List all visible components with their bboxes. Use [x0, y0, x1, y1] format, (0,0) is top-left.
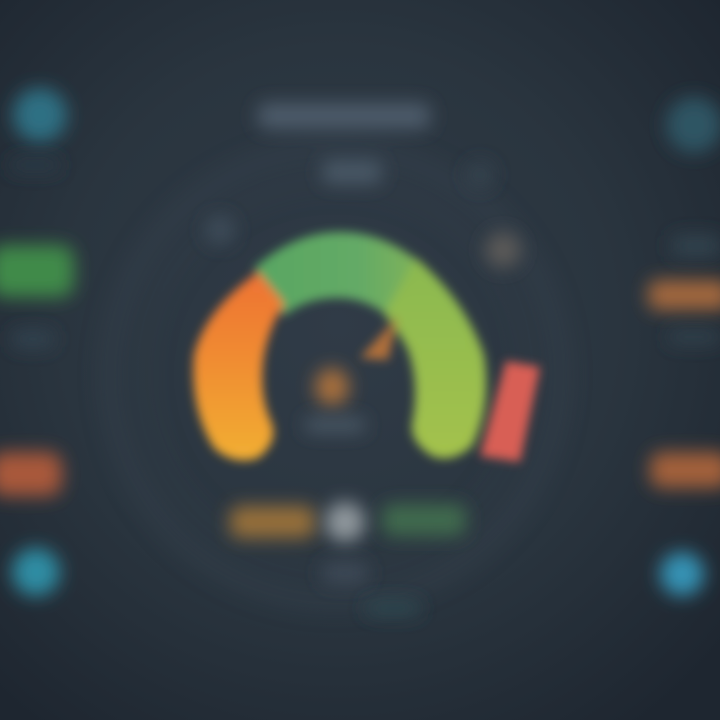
- needle: [360, 316, 398, 360]
- right bar: lower orange: [650, 452, 720, 488]
- bottom legend: [230, 502, 466, 616]
- marker: right lower: [466, 161, 494, 189]
- gauge segment: red: [480, 361, 540, 462]
- icon: bottom left teal: [12, 548, 60, 596]
- icon: bottom right teal: [660, 552, 704, 596]
- faint dial rings: [110, 150, 560, 600]
- marker: left: [205, 215, 235, 245]
- right label: lower: [668, 330, 720, 344]
- legend: green: [382, 504, 466, 536]
- right column: [648, 97, 720, 596]
- gauge: [193, 232, 540, 462]
- icon: top left teal: [13, 88, 67, 142]
- right bar: orange: [648, 280, 720, 310]
- legend: grey: [325, 502, 365, 542]
- marker: right: [485, 232, 521, 268]
- center hub icon: [315, 368, 349, 406]
- gauge segment: lime: [384, 258, 486, 458]
- left column: [0, 88, 74, 596]
- left label: grey: [12, 330, 54, 348]
- gauge segment: orange: [193, 272, 284, 460]
- right label: grey: [672, 235, 720, 257]
- center label: [305, 418, 365, 432]
- title: [258, 103, 430, 184]
- left label: teal: [10, 158, 60, 172]
- left bar: orange: [0, 452, 62, 496]
- legend: teal caption: [365, 600, 421, 616]
- small dial markers: [205, 161, 521, 268]
- gauge segment: green: [254, 232, 424, 316]
- subtitle: [322, 160, 382, 184]
- legend: caption: [322, 562, 368, 584]
- icon: top right teal: [666, 97, 720, 153]
- legend: orange: [230, 506, 315, 538]
- left bar: green: [0, 245, 74, 297]
